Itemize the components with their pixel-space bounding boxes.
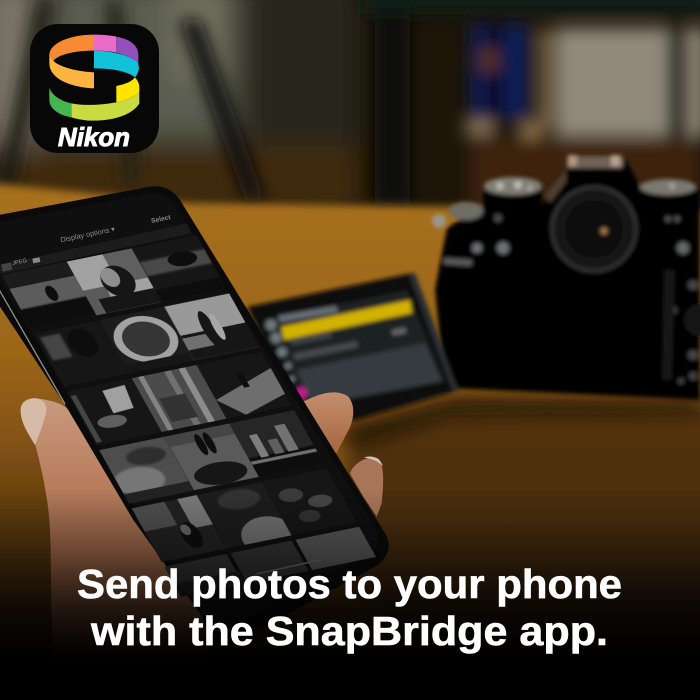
headline line 2: with the SnapBridge app. (90, 608, 608, 654)
monitor menu heading (278, 306, 338, 322)
camera shadow on table (340, 402, 700, 446)
label: JPEG filter (1, 257, 40, 272)
photo grid (0, 235, 376, 598)
monitor lower panel (297, 343, 442, 405)
label: Display options: Display options ▾ (60, 224, 116, 244)
monitor pink icon (295, 387, 307, 399)
photo: beach figure (216, 368, 285, 415)
photo: dark sky and dome (197, 482, 292, 548)
photo: cloud (100, 307, 192, 366)
camera (432, 155, 700, 400)
bottom dark gradient (0, 490, 700, 700)
photo: city skyline (230, 410, 318, 465)
photo: woman portrait (66, 248, 162, 316)
tilting LCD monitor (247, 273, 459, 421)
phone screen (0, 193, 378, 633)
camera body (435, 158, 700, 400)
phone body (0, 186, 389, 653)
icon tile (30, 24, 159, 153)
photo: dark silhouette (39, 328, 98, 362)
label: Select: Select (151, 214, 172, 225)
icon: multicoloured ring (49, 35, 139, 121)
photo: landscape with figure (2, 262, 96, 316)
photo row: partial bottom (164, 526, 376, 597)
photo: window reflections (132, 365, 226, 432)
photo: leaves (278, 488, 333, 534)
right dial (640, 179, 696, 254)
photo: building and woman (132, 495, 226, 562)
hand: palm and thumb (21, 398, 213, 680)
viewfinder eyepiece (552, 187, 636, 271)
photo: person with book (67, 384, 134, 445)
monitor highlighted row (281, 300, 412, 340)
photo: couple on street (164, 293, 259, 360)
photo: dark hand with lights (132, 235, 220, 302)
thumbnail (21, 398, 46, 445)
camera grip controls (662, 270, 700, 384)
photo: puddle reflection (164, 424, 259, 490)
smartphone (0, 186, 389, 653)
label: JPEG filter: JPEG (12, 258, 28, 267)
phone home indicator (257, 560, 320, 574)
headline (77, 561, 622, 654)
viewfinder hump (545, 155, 623, 203)
monitor menu rows (290, 332, 332, 345)
monitor screen (264, 290, 444, 407)
icon: Nikon wordmark: Nikon (58, 122, 130, 152)
monitor icons (266, 320, 295, 382)
finger: middle (350, 458, 383, 517)
headline line 1: Send photos to your phone (77, 561, 622, 607)
hand: fingers behind phone (300, 392, 383, 517)
phone edge highlight (0, 288, 65, 404)
Nikon SnapBridge app icon (30, 24, 159, 153)
wooden table (0, 182, 700, 700)
finger: index (300, 392, 353, 455)
left dials (432, 177, 542, 266)
app top bar (0, 223, 192, 275)
photo: blurry landscape (99, 436, 194, 504)
